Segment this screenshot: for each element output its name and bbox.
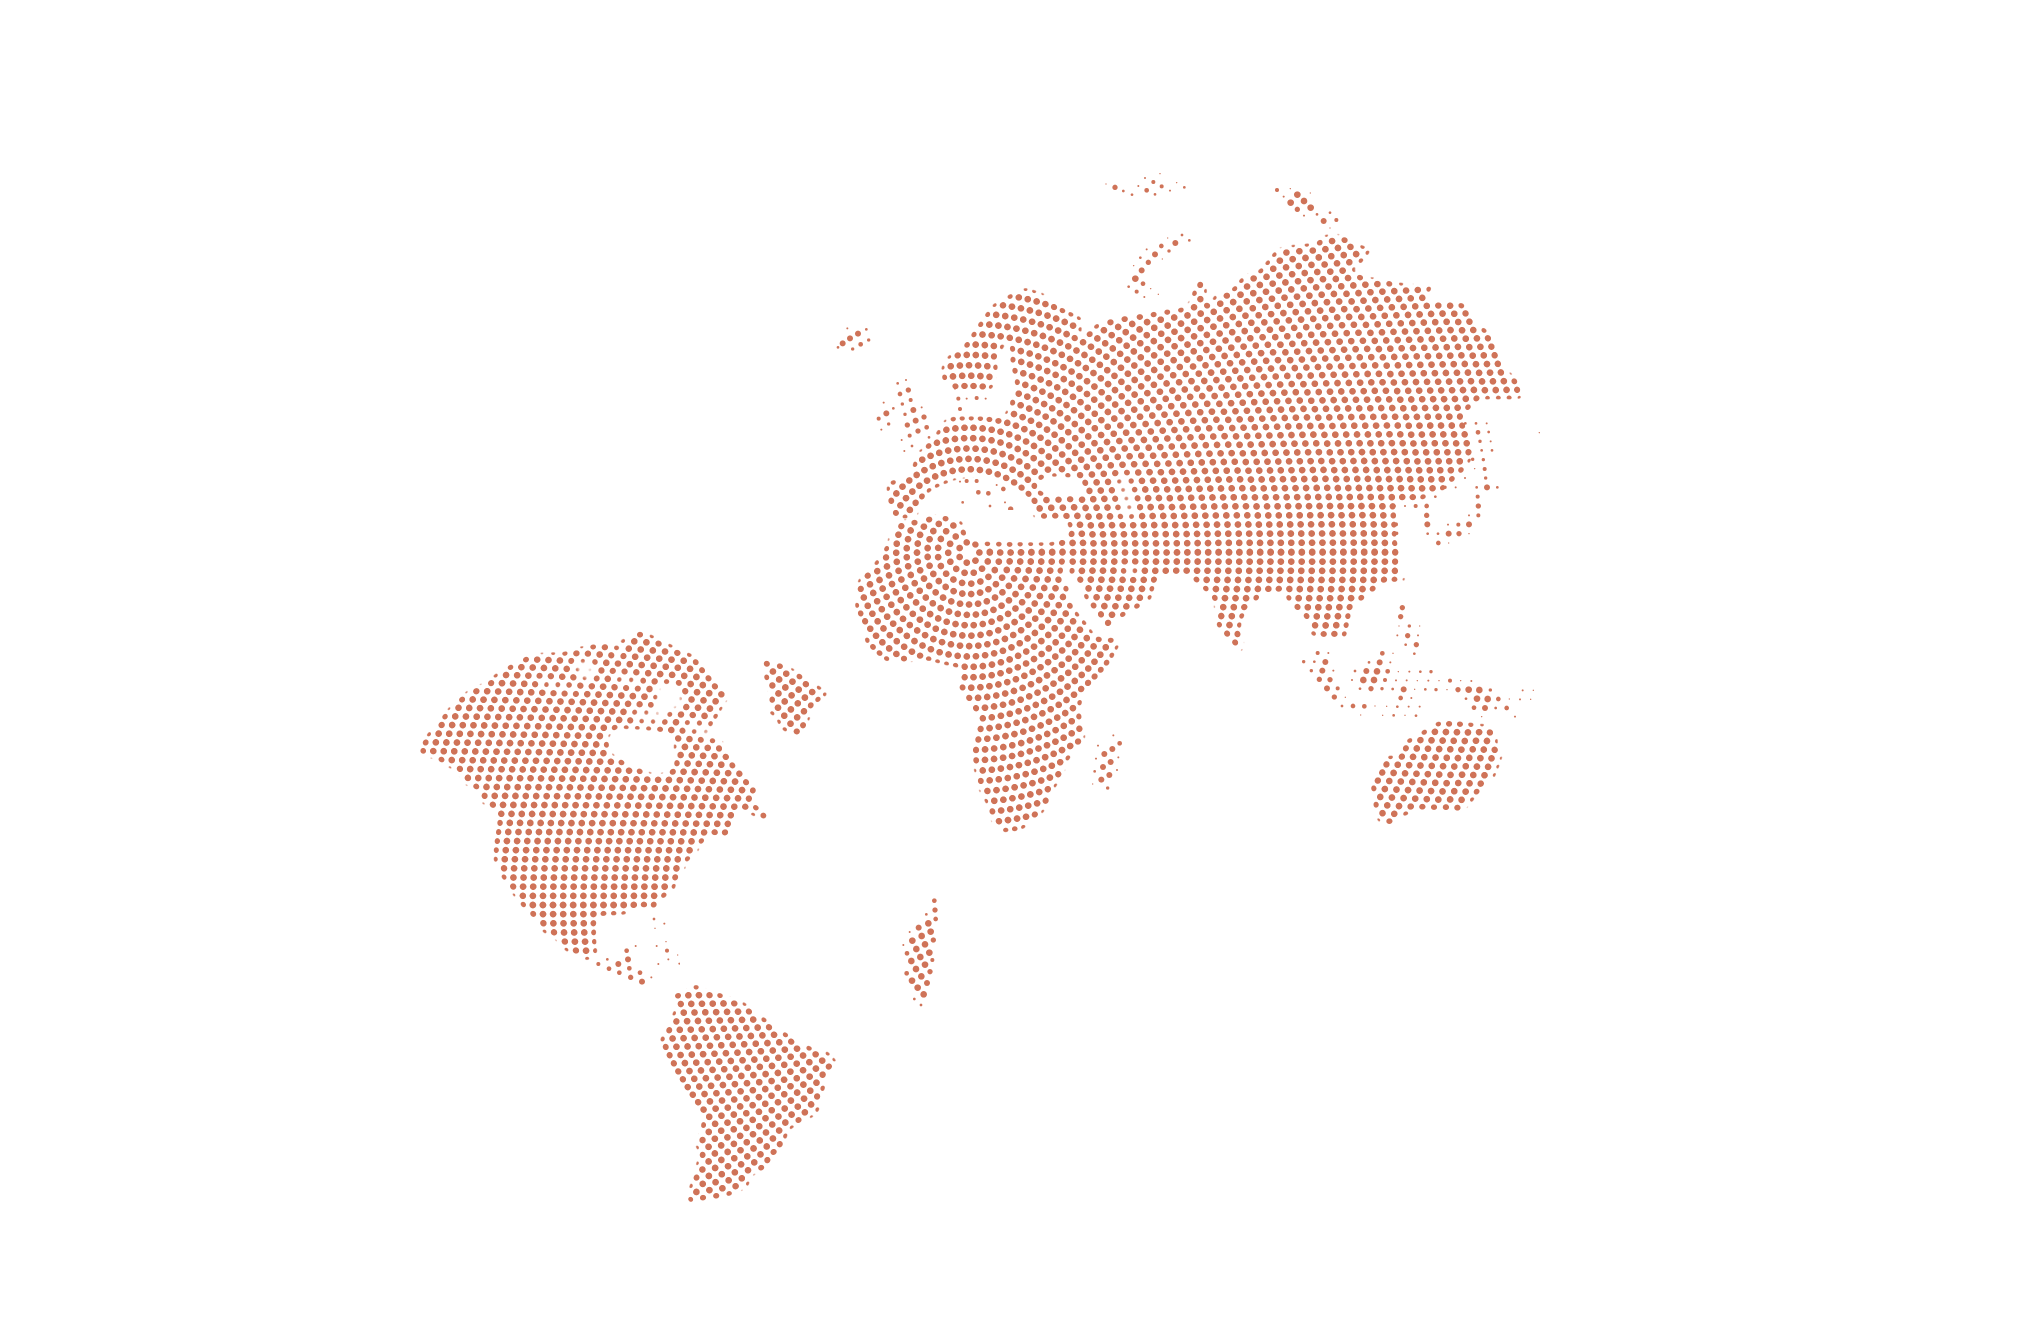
world map: halftone dots <box>420 173 1540 1202</box>
islands: Arctic archipelago north <box>1105 173 1186 196</box>
island: Novaya Zemlya <box>1127 234 1191 298</box>
islands: Denmark and Mediterranean <box>954 388 1014 510</box>
islands: Taiwan and Philippines <box>1396 605 1420 655</box>
islands: Severnaya Zemlya <box>1275 188 1338 229</box>
continent: Australia <box>1371 721 1502 824</box>
continent: Eurasia <box>886 234 1521 651</box>
continent: North America <box>420 632 766 960</box>
island: Antarctic peninsula fragment <box>902 898 938 1006</box>
continent: Africa <box>855 514 1119 832</box>
island: Greenland <box>764 660 827 734</box>
islands: British Isles <box>876 379 930 452</box>
island: Iceland <box>836 327 870 351</box>
continent: South America <box>660 985 836 1202</box>
islands: Sakhalin, Kurils and Japan arc <box>1396 422 1540 546</box>
Central America and Caribbean dots <box>596 918 680 985</box>
islands: Indonesia and New Guinea <box>1302 651 1534 718</box>
island: Madagascar <box>1092 734 1122 790</box>
